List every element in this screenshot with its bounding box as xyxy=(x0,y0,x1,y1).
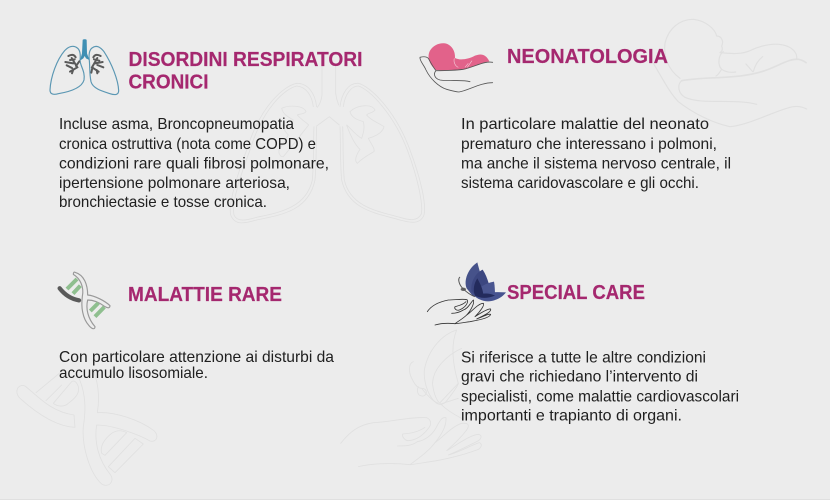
text: disordini respiratori cronici xyxy=(59,116,329,211)
text: disordini respiratori cronici: Incluse asma, Broncopneumopatia xyxy=(59,116,294,133)
text: special care: gravi che richiedano l’intervento di xyxy=(461,368,698,386)
text: neonatologia: sistema caridovascolare e gli occhi. xyxy=(461,175,699,192)
text: malattie rare: accumulo lisosomiale. xyxy=(59,365,208,382)
heading: disordini respiratori cronici: DISORDINI RESPIRATORI xyxy=(128,48,362,71)
icon: butterfly on hand xyxy=(427,262,506,325)
text: neonatologia: In particolare malattie del neonato xyxy=(461,116,709,133)
heading: special care: SPECIAL CARE xyxy=(507,281,645,304)
icon: newborn in hand xyxy=(420,43,493,92)
heading: disordini respiratori cronici xyxy=(128,48,362,94)
icon: lungs xyxy=(50,39,119,95)
text: malattie rare xyxy=(59,349,334,382)
text: disordini respiratori cronici: bronchiectasie e tosse cronica. xyxy=(59,194,267,211)
heading: disordini respiratori cronici: CRONICI xyxy=(128,70,208,94)
text: neonatologia: ma anche il sistema nervoso centrale, il xyxy=(461,156,731,172)
background watermark: DNA helix xyxy=(17,370,157,485)
text: disordini respiratori cronici: ipertensione polmonare arteriosa, xyxy=(59,175,290,192)
text: special care xyxy=(461,350,739,424)
text: special care: specialisti, come malattie cardiovascolari xyxy=(461,388,739,406)
background watermark: newborn in hand xyxy=(653,19,807,127)
heading: neonatologia: NEONATOLOGIA xyxy=(507,45,668,68)
text: malattie rare: Con particolare attenzione ai disturbi da xyxy=(59,349,334,366)
text: special care: importanti e trapianto di organi. xyxy=(461,408,682,424)
text: disordini respiratori cronici: cronica ostruttiva (nota come COPD) e xyxy=(59,136,316,153)
icon: DNA helix xyxy=(60,272,110,329)
text: special care: Si riferisce a tutte le altre condizioni xyxy=(461,350,706,366)
text: disordini respiratori cronici: condizioni rare quali fibrosi polmonare, xyxy=(59,156,329,172)
heading: malattie rare: MALATTIE RARE xyxy=(128,283,282,306)
text: neonatologia: prematuro che interessano i polmoni, xyxy=(461,136,717,153)
background watermark: lungs xyxy=(230,63,425,223)
text: neonatologia xyxy=(461,116,731,192)
background watermark: butterfly and hand xyxy=(341,330,481,467)
